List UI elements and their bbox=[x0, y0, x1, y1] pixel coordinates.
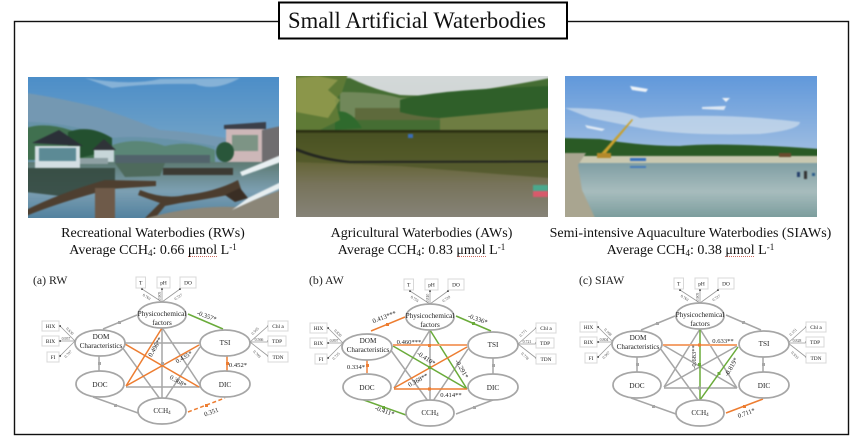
loadings c: 0.933 bbox=[790, 351, 799, 360]
indicator boxes a: BIX bbox=[46, 339, 55, 345]
coefficients a: -0.357* bbox=[196, 310, 217, 323]
caption: recreational bbox=[61, 226, 245, 258]
indicator boxes a: Chl a bbox=[272, 324, 284, 330]
nodes a: factors bbox=[152, 319, 172, 327]
loadings a: 0.905 bbox=[158, 292, 162, 300]
nodes b: Physicochemical bbox=[406, 312, 454, 320]
caption: agricultural: : 0.83 μmol L bbox=[421, 243, 498, 258]
caption: aquaculture: 4 bbox=[685, 248, 690, 258]
indicator boxes b: TDP bbox=[540, 341, 550, 347]
indicator boxes b: BIX bbox=[314, 341, 323, 347]
loadings b: 0.729 bbox=[442, 295, 451, 303]
nodes c: DIC bbox=[758, 382, 770, 390]
loadings c: 0.828 bbox=[793, 339, 801, 343]
indicator boxes b: Chl a bbox=[540, 326, 552, 332]
nodes a bbox=[75, 302, 250, 424]
nodes b: 4 bbox=[436, 413, 439, 418]
loadings b: 0.820 bbox=[333, 329, 342, 338]
loadings b: 0.721 bbox=[523, 340, 531, 344]
coefficients b: 0.368** bbox=[407, 373, 429, 389]
nodes a: Characteristics bbox=[80, 342, 123, 350]
caption: agricultural: Agricultural Waterbodies (AWs) bbox=[331, 226, 513, 241]
loadings a: 0.565 bbox=[251, 327, 260, 336]
indicator boxes c: TDN bbox=[810, 356, 822, 362]
nodes a: DOM bbox=[93, 333, 110, 341]
coefficients a: 0.368* bbox=[168, 374, 187, 389]
loadings b: 0.810 bbox=[426, 294, 430, 302]
nodes a: 4 bbox=[168, 411, 171, 416]
indicator boxes b: TDN bbox=[540, 357, 552, 363]
diagram: (c) SIAW bbox=[579, 273, 826, 426]
loadings c: 0.763 bbox=[680, 294, 689, 302]
loadings b: 0.725 bbox=[332, 352, 341, 361]
nodes c: DOM bbox=[630, 334, 647, 342]
nodes a: Physicochemical bbox=[138, 310, 186, 318]
indicator boxes c: BIX bbox=[584, 340, 593, 346]
indicator boxes c: TDP bbox=[810, 340, 820, 346]
loadings c: 0.804 bbox=[600, 338, 608, 342]
loadings c bbox=[597, 289, 807, 360]
caption: recreational: Recreational Waterbodies (RWs) bbox=[61, 226, 245, 241]
caption: agricultural bbox=[331, 226, 513, 258]
title bbox=[279, 2, 567, 38]
indicator boxes c: DO bbox=[722, 282, 730, 288]
indicator boxes a: TDP bbox=[272, 339, 282, 345]
loadings c: 0.905 bbox=[696, 293, 700, 301]
diagram: (b) AW bbox=[309, 273, 556, 426]
coefficients a: 0.452* bbox=[229, 362, 247, 369]
indicator boxes b: pH bbox=[428, 282, 435, 288]
nodes c: factors bbox=[690, 320, 710, 328]
indicator boxes c: Chl a bbox=[810, 325, 822, 331]
indicator boxes c: FI bbox=[589, 356, 594, 362]
coefficients c: 0.711* bbox=[737, 407, 756, 420]
loadings a: 0.957 bbox=[62, 337, 70, 341]
loadings c: 0.967 bbox=[602, 351, 611, 360]
coefficients c: -0.819* bbox=[724, 357, 740, 378]
nodes c: 4 bbox=[706, 413, 709, 418]
coefficients b: 0.414** bbox=[440, 392, 462, 399]
coefficients a: 0.435* bbox=[175, 350, 194, 365]
loadings b: 0.771 bbox=[519, 329, 528, 338]
nodes a: DOC bbox=[92, 381, 108, 389]
caption: recreational: 4 bbox=[148, 248, 153, 258]
caption: agricultural: 4 bbox=[416, 248, 421, 258]
coefficients c bbox=[691, 338, 756, 420]
nodes b: DIC bbox=[487, 384, 499, 392]
loadings a: 0.727 bbox=[174, 293, 183, 301]
nodes a: TSI bbox=[220, 339, 231, 347]
coefficients a bbox=[147, 310, 247, 418]
indicator boxes c bbox=[580, 278, 826, 363]
loadings a: 0.763 bbox=[142, 293, 151, 301]
nodes b: CCH bbox=[421, 409, 436, 417]
indicator boxes b: T bbox=[407, 282, 411, 288]
loadings b: 0.897 bbox=[330, 339, 338, 343]
coefficients b bbox=[347, 310, 488, 418]
nodes c: Characteristics bbox=[617, 343, 660, 351]
indicator boxes c: T bbox=[677, 282, 681, 288]
loadings c: 0.168 bbox=[603, 328, 612, 337]
nodes b: TSI bbox=[488, 341, 499, 349]
edges c bbox=[631, 315, 765, 414]
caption: recreational: -1 bbox=[229, 242, 237, 252]
panel label b: (b) AW bbox=[309, 273, 345, 287]
nodes b: Characteristics bbox=[347, 346, 390, 354]
indicator boxes c: pH bbox=[698, 282, 705, 288]
loadings a bbox=[59, 288, 269, 359]
indicator boxes b: FI bbox=[319, 357, 324, 363]
coefficients a: 0.496** bbox=[147, 336, 164, 358]
nodes b: factors bbox=[420, 321, 440, 329]
loadings a: 0.630 bbox=[65, 327, 74, 336]
nodes c: CCH bbox=[691, 409, 706, 417]
nodes c: DOC bbox=[629, 382, 645, 390]
loadings a: 0.797 bbox=[64, 350, 73, 359]
nodes b bbox=[342, 304, 518, 426]
nodes b: DOC bbox=[359, 384, 375, 392]
photo: recreational waterbody bbox=[26, 75, 281, 220]
coefficients b: -0.411* bbox=[374, 405, 395, 418]
edges a bbox=[93, 314, 229, 413]
loadings b: 0.778 bbox=[520, 352, 529, 361]
title: Small Artificial Waterbodies bbox=[288, 8, 546, 33]
nodes c bbox=[612, 303, 789, 426]
caption: recreational: Average CCH bbox=[69, 243, 148, 258]
indicator boxes a: T bbox=[139, 280, 143, 286]
nodes b: DOM bbox=[360, 337, 377, 345]
coefficients b: -0.291* bbox=[453, 359, 469, 380]
coefficients a: 0.351 bbox=[203, 407, 220, 418]
loadings b bbox=[327, 290, 537, 361]
nodes a: DIC bbox=[219, 381, 231, 389]
indicator boxes a: FI bbox=[51, 355, 56, 361]
indicator boxes a: TDN bbox=[272, 355, 284, 361]
indicator boxes c: HIX bbox=[584, 325, 593, 331]
photo: agricultural waterbody bbox=[294, 74, 550, 220]
nodes a: CCH bbox=[153, 407, 168, 415]
coefficients c: 0.633** bbox=[712, 338, 734, 345]
coefficients c: -0.683** bbox=[691, 345, 698, 369]
caption: agricultural: Average CCH bbox=[338, 243, 416, 258]
caption: aquaculture: Average CCH bbox=[607, 243, 685, 258]
photo: aquaculture waterbody bbox=[563, 74, 819, 220]
panel label c: (c) SIAW bbox=[579, 273, 625, 287]
panel label a: (a) RW bbox=[33, 273, 68, 287]
caption: aquaculture: -1 bbox=[767, 242, 774, 252]
indicator boxes a: HIX bbox=[46, 324, 55, 330]
coefficients b: -0.336* bbox=[467, 313, 488, 326]
coefficients b: 0.334* bbox=[347, 364, 365, 371]
coefficients b: 0.460*** bbox=[397, 339, 421, 346]
caption: aquaculture bbox=[550, 226, 832, 258]
indicator boxes a: DO bbox=[184, 280, 192, 286]
caption: aquaculture: Semi-intensive Aquaculture Waterbodies (SIAWs) bbox=[550, 226, 832, 241]
coefficients b: 0.413*** bbox=[372, 310, 397, 325]
loadings c: 0.727 bbox=[712, 294, 721, 302]
caption: aquaculture: : 0.38 μmol L bbox=[690, 243, 767, 258]
indicator boxes b: HIX bbox=[314, 326, 323, 332]
diagram: (a) RW bbox=[33, 273, 288, 424]
nodes c: TSI bbox=[759, 340, 770, 348]
indicator boxes a bbox=[42, 277, 288, 362]
indicator boxes b bbox=[310, 279, 556, 364]
caption: recreational: : 0.66 μmol L bbox=[152, 243, 229, 258]
indicator boxes a: pH bbox=[160, 280, 167, 286]
indicator boxes b: DO bbox=[452, 282, 460, 288]
coefficients b: -0.410* bbox=[415, 350, 436, 367]
nodes c: Physicochemical bbox=[676, 311, 724, 319]
loadings a: 0.566 bbox=[255, 338, 263, 342]
edges b bbox=[361, 316, 495, 415]
loadings b: 0.755 bbox=[410, 295, 419, 303]
loadings c: 0.151 bbox=[789, 328, 798, 337]
loadings a: 0.709 bbox=[252, 350, 261, 359]
caption: agricultural: -1 bbox=[498, 242, 505, 252]
